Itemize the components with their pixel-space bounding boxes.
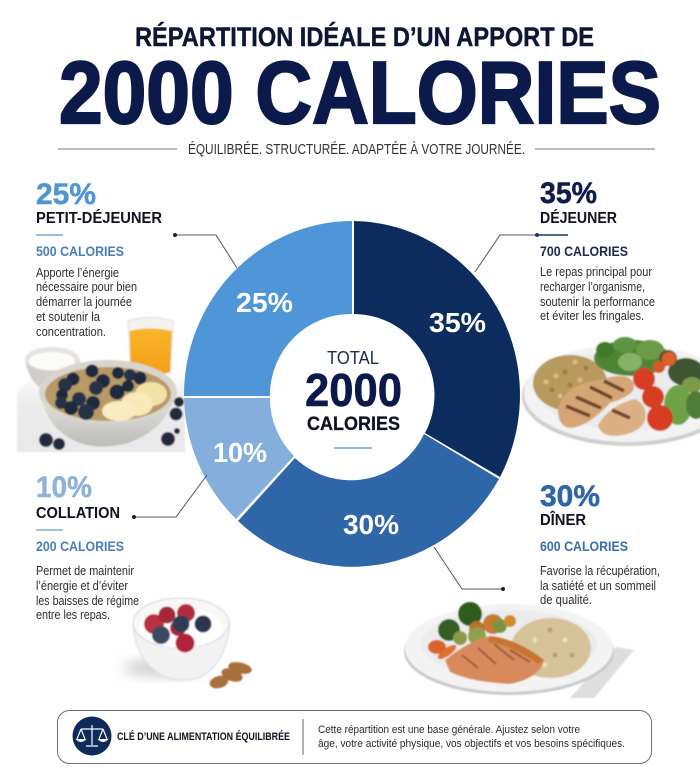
footer text: âge, votre activité physique, vos objectifs et vos besoins spécifiques. <box>318 738 625 750</box>
salmon <box>445 636 544 684</box>
almonds <box>208 660 253 690</box>
text block: 25% petit-déjeuner: PETIT-DÉJEUNER <box>36 208 162 227</box>
rice <box>533 355 607 411</box>
text block: 25% petit-déjeuner <box>36 178 162 339</box>
text block: 30% dîner: 30% <box>540 480 600 513</box>
text block: 35% déjeuner: 700 CALORIES <box>540 243 628 259</box>
food image: lunch <box>522 337 700 446</box>
text block: 25% petit-déjeuner: 25% <box>36 178 96 211</box>
center total <box>305 348 402 448</box>
leader line: déjeuner <box>475 233 539 272</box>
text block: 10% collation: entre les repas. <box>36 608 110 622</box>
text block: 35% déjeuner <box>537 177 655 323</box>
text block: 35% déjeuner: recharger l’organisme, <box>540 280 645 294</box>
berries <box>144 604 212 652</box>
text block: 30% dîner: Favorise la récupération, <box>540 564 660 578</box>
slice: 10% collation <box>184 398 294 519</box>
text block: 10% collation: COLLATION <box>36 505 120 522</box>
text block: 35% déjeuner: 35% <box>540 177 597 210</box>
text block: 30% dîner: la satiété et un sommeil <box>540 579 656 593</box>
chicken <box>558 376 646 436</box>
oatmeal bowl <box>39 360 177 446</box>
text block: 25% petit-déjeuner: et soutenir la <box>36 310 100 324</box>
text block: 10% collation: 10% <box>36 471 92 504</box>
header title <box>59 21 661 142</box>
label 35%: 35% <box>429 307 486 338</box>
footer heading: CLÉ D’UNE ALIMENTATION ÉQUILIBRÉE <box>117 730 290 743</box>
small yogurt bowl <box>25 347 80 391</box>
text block: 10% collation: l’énergie et d’éviter <box>36 579 128 593</box>
text block: 35% déjeuner: Le repas principal pour <box>540 265 652 279</box>
center hole <box>270 315 432 477</box>
text block: 10% collation: Permet de maintenir <box>36 564 134 578</box>
leader line: petit-déjeuner <box>173 233 237 268</box>
text block: 25% petit-déjeuner: concentration. <box>36 325 106 339</box>
slice: 25% petit-déjeuner <box>184 221 352 396</box>
text block: 10% collation: 200 CALORIES <box>36 538 124 554</box>
center total: 2000 <box>305 364 402 416</box>
footer text <box>318 724 625 750</box>
food image: dinner <box>404 602 634 698</box>
icon: balance scale <box>72 716 112 756</box>
vegetables <box>428 602 516 662</box>
text block: 30% dîner: 600 CALORIES <box>540 538 628 554</box>
donut chart <box>184 221 520 567</box>
text block: 35% déjeuner: DÉJEUNER <box>540 208 617 227</box>
text block: 35% déjeuner: soutenir la performance <box>540 295 655 309</box>
tomatoes <box>633 352 676 431</box>
text block: 10% collation: les baisses de régime <box>36 594 139 608</box>
footer note box <box>58 710 652 764</box>
rice <box>511 618 591 678</box>
title line 1: RÉPARTITION IDÉALE D’UN APPORT DE <box>135 21 594 52</box>
label 25%: 25% <box>236 287 293 318</box>
food image: breakfast <box>17 318 185 452</box>
center total: TOTAL <box>327 348 379 368</box>
text block: 25% petit-déjeuner: 500 CALORIES <box>36 243 124 259</box>
center total: CALORIES <box>307 414 400 435</box>
label 30%: 30% <box>343 509 399 540</box>
food image: yogurt snack <box>123 598 253 690</box>
footer text: Cette répartition est une base générale. Ajustez selon votre <box>318 724 580 736</box>
scattered blueberries <box>39 397 184 450</box>
leader line: collation <box>132 475 207 519</box>
text block: 25% petit-déjeuner: démarrer la journée <box>36 295 132 309</box>
text block: 25% petit-déjeuner: Apporte l’énergie <box>36 266 119 280</box>
subtitle: ÉQUILIBRÉE. STRUCTURÉE. ADAPTÉE À VOTRE JOURNÉE. <box>188 141 525 158</box>
napkin <box>570 647 634 698</box>
leader line: dîner <box>434 547 505 591</box>
text block: 25% petit-déjeuner: nécessaire pour bien <box>36 280 137 294</box>
slice: 35% déjeuner <box>354 221 520 477</box>
text block: 10% collation <box>36 471 139 622</box>
salad <box>594 337 700 425</box>
label 10%: 10% <box>213 437 267 468</box>
text block: 30% dîner <box>540 480 660 607</box>
text block: 30% dîner: de qualité. <box>540 593 592 607</box>
text block: 30% dîner: DÎNER <box>540 510 586 529</box>
text block: 35% déjeuner: et éviter les fringales. <box>540 309 644 323</box>
juice glass <box>128 318 173 375</box>
slice: 30% dîner <box>238 434 499 567</box>
